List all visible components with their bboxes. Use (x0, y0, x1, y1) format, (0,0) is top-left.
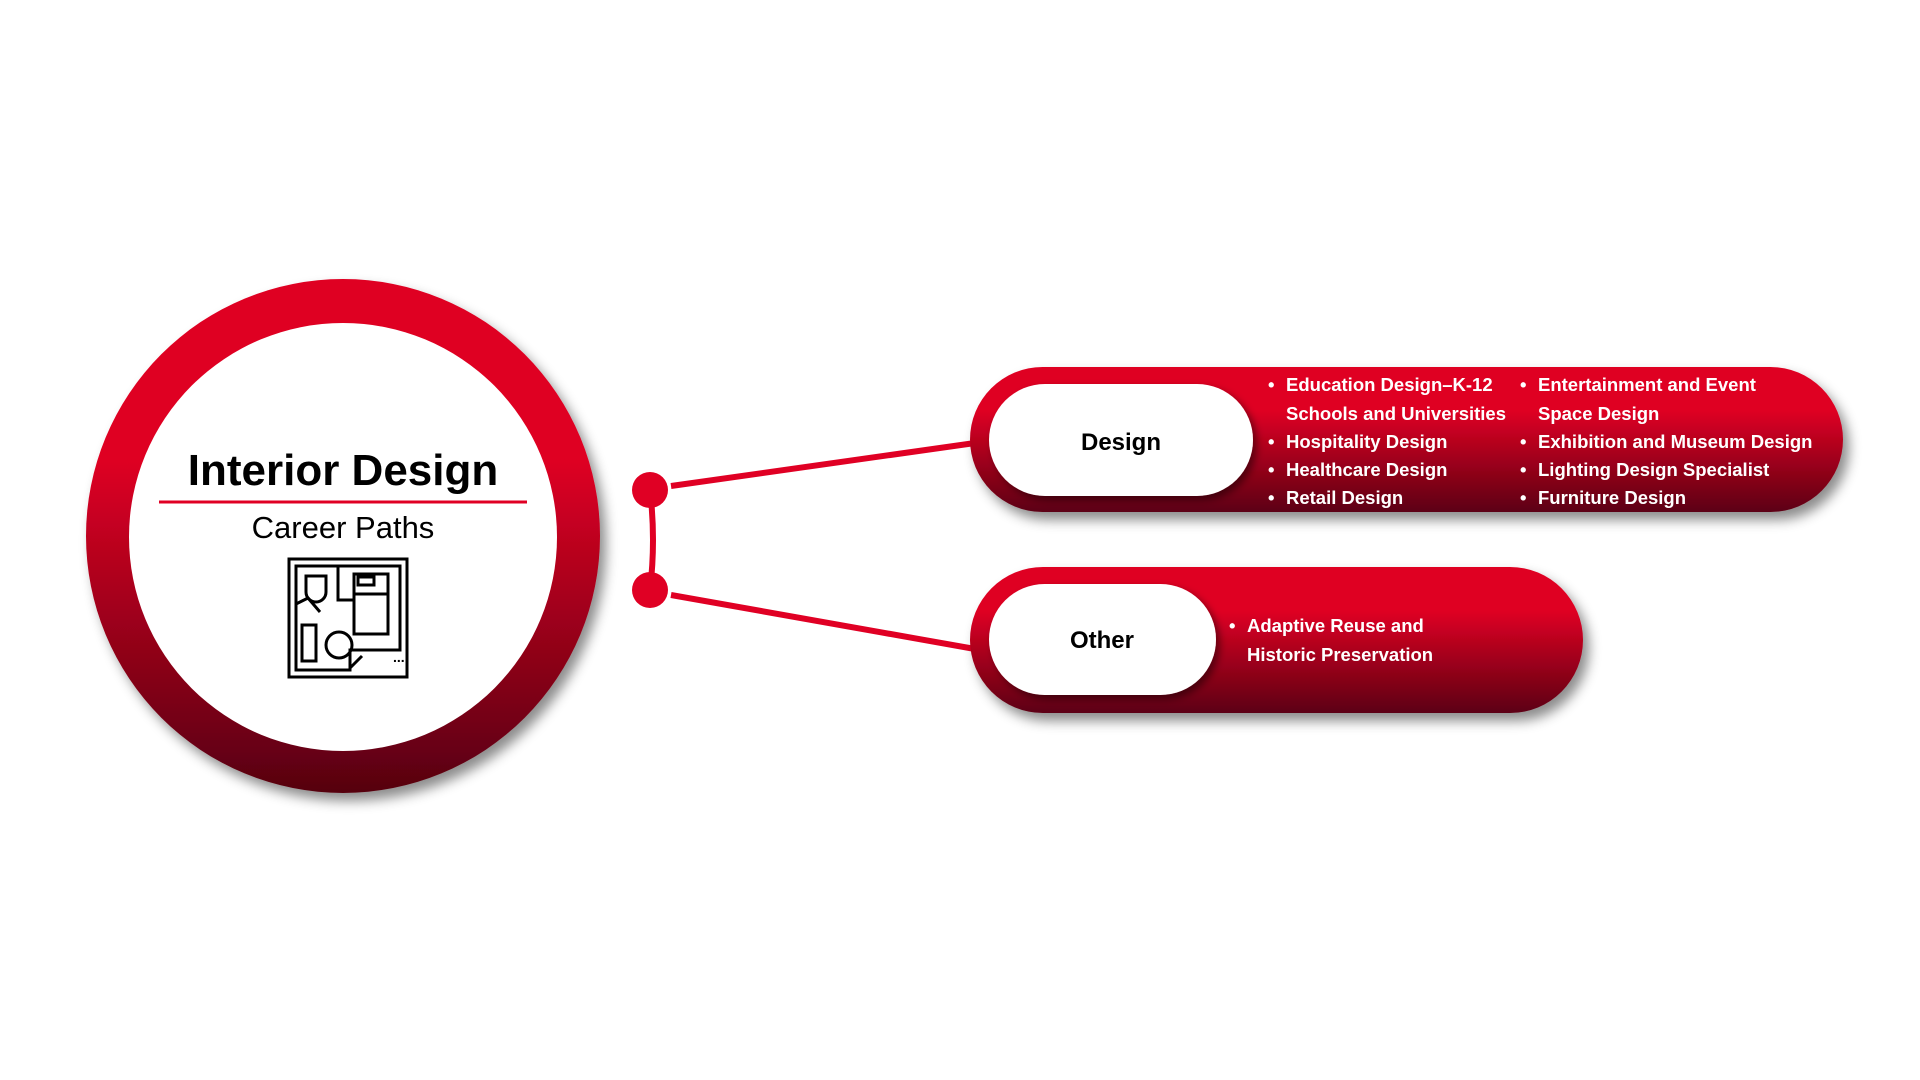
panel: design: Retail Design (1286, 487, 1403, 508)
panel: design: • (1268, 431, 1274, 452)
panel: design: • (1268, 374, 1274, 395)
panel: design (970, 367, 1843, 512)
panel: design: Healthcare Design (1286, 459, 1447, 480)
panel: other: • (1229, 615, 1235, 636)
panel: other: Other (1070, 627, 1134, 654)
panel: design: • (1520, 374, 1526, 395)
panel: design: Furniture Design (1538, 487, 1686, 508)
panel: design: • (1268, 487, 1274, 508)
panel: other: Adaptive Reuse and (1247, 615, 1424, 636)
panel: design: • (1520, 487, 1526, 508)
icon: floor plan (289, 559, 407, 677)
main circle: ... (393, 649, 405, 665)
panel: design: Exhibition and Museum Design (1538, 431, 1812, 452)
panel: design: Entertainment and Event (1538, 374, 1756, 395)
panel: design: Hospitality Design (1286, 431, 1447, 452)
panel: design: • (1268, 459, 1274, 480)
panel: other (970, 567, 1583, 713)
panel: other: Historic Preservation (1247, 644, 1433, 665)
panel: design: Design (1081, 429, 1161, 456)
subtitle: Career Paths (252, 510, 434, 545)
panel: design: Schools and Universities (1286, 403, 1506, 424)
panel: design: • (1520, 431, 1526, 452)
panel: design: Space Design (1538, 403, 1659, 424)
connectors (632, 443, 975, 649)
main circle (86, 279, 600, 793)
title: Interior Design (188, 446, 498, 495)
panel: design: • (1520, 459, 1526, 480)
panel: design: Education Design–K-12 (1286, 374, 1493, 395)
panel: design: Lighting Design Specialist (1538, 459, 1769, 480)
